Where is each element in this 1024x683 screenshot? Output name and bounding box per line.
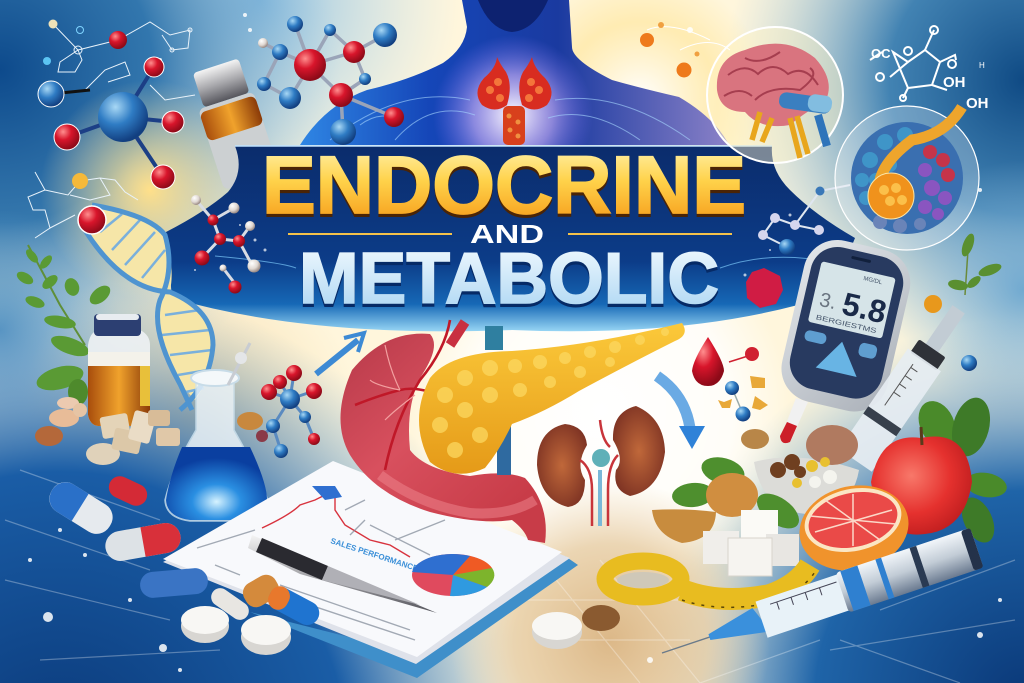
capsules: left: [44, 473, 209, 599]
pen: [248, 535, 437, 613]
chemical structure: OH: [966, 95, 988, 112]
arrow: rising: [316, 333, 364, 374]
title: AND with rules: AND: [470, 219, 544, 249]
plant: right sprig: [947, 232, 1003, 295]
pancreas: [419, 323, 685, 474]
report document: [163, 461, 578, 678]
medicine bottle: top: [187, 57, 280, 190]
title: ENDOCRINE: ENDOCRINE: [262, 140, 746, 231]
sugar cubes: [703, 510, 799, 576]
banner: [166, 146, 855, 331]
tablets: left cluster: [35, 397, 263, 465]
grapefruit: [791, 475, 917, 581]
arrow: falling: [657, 376, 705, 449]
title: ENDOCRINE: ENDOCRINE: [262, 143, 746, 234]
insulin syringe pen: [655, 528, 984, 673]
measuring tape: [605, 561, 816, 607]
hormone particle: [746, 268, 783, 308]
cell cluster: [835, 106, 979, 250]
molecular network: top left: [28, 22, 195, 238]
human torso silhouette: [300, 0, 729, 145]
syringe: [839, 298, 975, 472]
flask with blue liquid: [165, 343, 268, 521]
small floating atoms: right: [924, 295, 977, 371]
chemical structure: H: [979, 61, 985, 70]
molecule: top centre red hub: [257, 16, 404, 145]
leaves: centre right: [671, 453, 805, 535]
chemical structure: OH: [943, 74, 966, 91]
brain: [707, 27, 843, 163]
test strip: [780, 398, 808, 443]
small molecule: right centre: [718, 376, 768, 422]
apple with leaves: [871, 393, 1009, 548]
glucose meter: MG/DL: [863, 276, 883, 286]
plant: top left sprig: [15, 245, 114, 405]
molecule: top left blue hub: [38, 57, 184, 189]
molecule: centre left: [256, 365, 322, 458]
kidneys: [537, 406, 665, 526]
DNA helix: [78, 205, 213, 410]
nuts: [652, 473, 758, 543]
report document: SALES PERFORMANCE: [329, 536, 420, 573]
pills: bottom: [181, 571, 620, 655]
chemical structure: OC: [871, 46, 891, 61]
blood drop: [692, 337, 759, 386]
title: METABOLIC: METABOLIC: [299, 242, 719, 322]
food bowl: [741, 425, 859, 514]
medicine bottle: left: [88, 314, 150, 426]
glucose meter: [775, 233, 917, 443]
glucose meter: 5.8: [839, 285, 890, 330]
glucose meter: 3.: [817, 289, 838, 314]
stomach and duodenum: [340, 320, 546, 543]
glucose meter: BERGIESTMS: [815, 314, 878, 335]
atom: network accents: [43, 20, 127, 189]
small floating atoms: [640, 22, 730, 78]
molecule: banner right: [758, 185, 850, 255]
molecule: banner left: [191, 195, 260, 294]
pie chart: [412, 554, 494, 596]
thyroid gland: [477, 57, 552, 145]
chemical structure: [870, 26, 988, 112]
title: METABOLIC: METABOLIC: [299, 239, 719, 319]
